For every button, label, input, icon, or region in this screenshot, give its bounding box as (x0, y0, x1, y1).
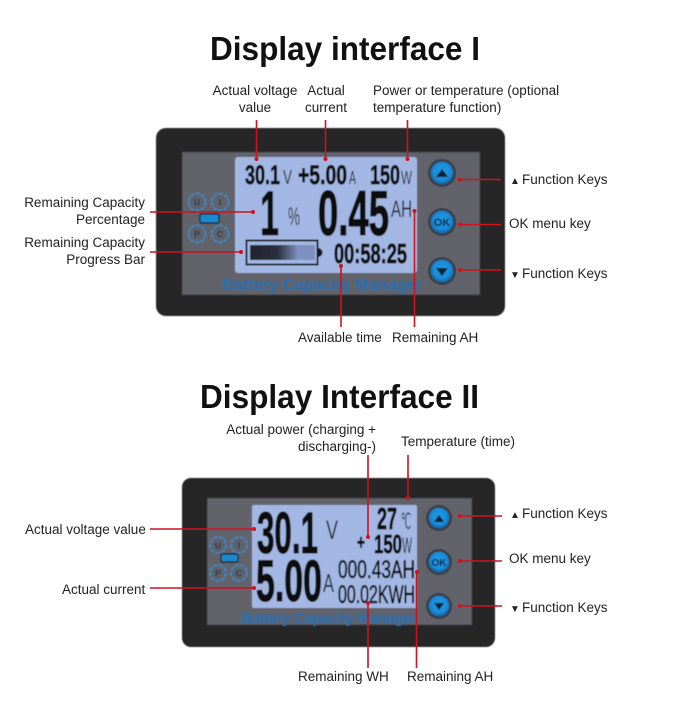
label: actual voltage value: Actual voltage value (25, 522, 146, 537)
reading: power: 150 (374, 529, 402, 559)
label: remaining capacity progress bar: Remaining Capacity (24, 235, 145, 250)
label: up function keys: ▲ (510, 510, 520, 521)
reading: voltage: 30.1 (257, 501, 318, 566)
label: remaining capacity progress bar: Progress Bar (66, 252, 146, 267)
front panel (182, 152, 480, 295)
reading: remaining AH: 000.43AH (338, 556, 415, 584)
label: up function keys: ▲ (510, 176, 520, 187)
label: up function keys: Function Keys (522, 172, 608, 187)
indicator icons: U (194, 198, 200, 208)
reading: current: A (349, 168, 356, 188)
reading: current (256, 549, 334, 614)
label: down function keys: Function Keys (522, 600, 608, 615)
reading: available time: 00:58:25 (334, 238, 407, 269)
battery progress bar (246, 240, 322, 264)
brand text: Battery Capacity Manager (241, 610, 417, 627)
label: actual voltage value: Actual voltage (213, 83, 297, 98)
button: up (426, 505, 452, 531)
device: second display interface (182, 478, 495, 647)
reading: power (357, 529, 412, 559)
device casing (156, 128, 505, 316)
label: power or temperature: temperature function) (373, 100, 501, 115)
indicator icons: P (194, 230, 200, 240)
reading: remaining AH: AH (391, 196, 412, 223)
LCD screen (252, 505, 417, 608)
indicator icons: U (215, 540, 221, 550)
device casing (182, 478, 495, 647)
label: OK menu key: OK menu key (509, 551, 591, 566)
reading: current: 5.00 (256, 549, 322, 614)
label: power or temperature: Power or temperature (optional (373, 83, 559, 98)
button: down (426, 593, 452, 619)
title: Display interface I: Display interface I (210, 30, 480, 67)
button: OK: OK (434, 217, 450, 229)
label: remaining AH: Remaining AH (392, 330, 478, 345)
reading: voltage: V (283, 167, 292, 189)
brand text: Battery Capacity Manager (222, 277, 422, 294)
indicator icons (210, 537, 247, 581)
label: available time: Available time (298, 330, 382, 345)
callout lines: second display (150, 455, 502, 668)
button: up (428, 159, 456, 187)
reading: capacity percentage: % (288, 203, 300, 231)
title: Display Interface II: Display Interface II (200, 378, 479, 415)
front panel (207, 498, 472, 625)
button: OK: OK (432, 558, 447, 569)
label: down function keys: Function Keys (522, 266, 608, 281)
label: remaining WH: Remaining WH (298, 669, 389, 684)
indicator icons: C (217, 230, 224, 240)
label: actual current: current (305, 100, 347, 115)
label: actual power: Actual power (charging + (226, 422, 376, 437)
label: up function keys: Function Keys (522, 506, 608, 521)
reading: voltage: 30.1 (245, 160, 280, 190)
reading: remaining AH: 0.45 (318, 179, 389, 249)
callout lines: first display (150, 120, 501, 327)
reading: current: A (323, 568, 334, 598)
reading: voltage: V (326, 515, 338, 545)
reading: power: 150 (370, 160, 400, 190)
label: actual current: Actual current (62, 582, 146, 597)
label: OK menu key: OK menu key (509, 216, 591, 231)
label: remaining capacity percentage: Percentage (76, 212, 145, 227)
indicator icons (188, 194, 228, 242)
label: temperature: Temperature (time) (401, 434, 515, 449)
label: down function keys: ▼ (510, 270, 520, 281)
button: down (428, 257, 456, 285)
reading: remaining WH: 00.02KWH (338, 581, 415, 609)
LCD screen (235, 157, 417, 273)
label: actual current: Actual (307, 83, 345, 98)
indicator icons: I (219, 198, 221, 208)
reading: capacity percentage: 1 (260, 179, 279, 249)
label: actual voltage value: value (239, 100, 271, 115)
device: second display interface: W (402, 533, 412, 558)
reading: current: +5.00 (298, 160, 347, 190)
label: remaining capacity percentage: Remaining Capacity (24, 195, 145, 210)
reading: power: + (357, 532, 365, 554)
indicator icons: I (238, 540, 240, 550)
indicator icons: P (215, 568, 221, 578)
indicator icons: C (236, 568, 243, 578)
device: first display interface (156, 128, 505, 316)
label: down function keys: ▼ (510, 604, 520, 615)
button: OK (426, 549, 452, 575)
button: OK (428, 208, 456, 236)
label: actual power: discharging-) (298, 439, 376, 454)
reading: power: W (401, 168, 412, 188)
device: second display interface: ℃ (401, 509, 411, 534)
reading: temperature: 27 (377, 501, 397, 536)
label: remaining AH: Remaining AH (407, 669, 493, 684)
